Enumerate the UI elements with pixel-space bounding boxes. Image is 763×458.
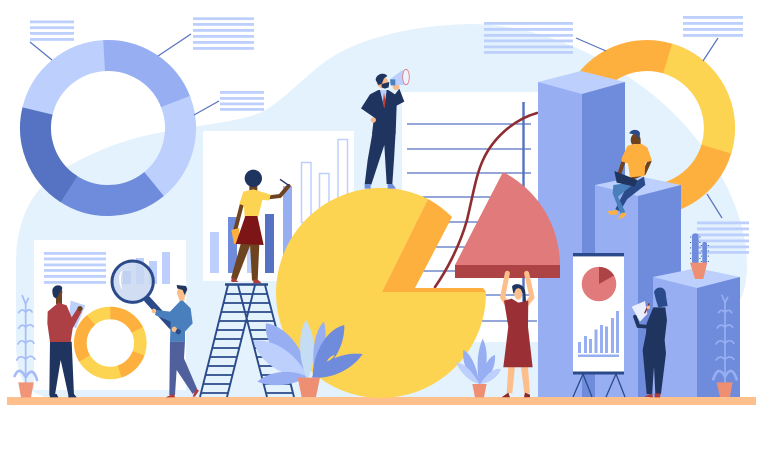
panel: line chart board xyxy=(402,92,540,342)
panel: bar chart board xyxy=(203,131,354,281)
text lines: right xyxy=(697,222,749,254)
person: woman on ladder xyxy=(231,170,289,283)
plant: on short column xyxy=(713,295,737,397)
3D column: short xyxy=(653,268,740,397)
small bars on left board xyxy=(123,252,170,284)
orange donut on left board xyxy=(69,302,151,384)
text lines: top centre right xyxy=(484,22,573,54)
person: man holding magnifier xyxy=(152,285,199,397)
rising trend curve xyxy=(435,113,537,287)
plant: left potted xyxy=(15,296,37,397)
text lines: left board xyxy=(44,252,106,284)
person: man with laptop xyxy=(607,130,652,219)
person: woman lifting slice xyxy=(502,273,533,397)
bar chart xyxy=(210,140,348,273)
person: man with megaphone xyxy=(361,69,409,189)
person: man with clipboard xyxy=(47,285,85,397)
magnifying glass xyxy=(112,261,177,331)
person: woman with paper xyxy=(632,287,668,397)
background blob xyxy=(16,24,747,397)
large yellow pie chart xyxy=(276,188,486,398)
text lines: top right xyxy=(683,16,743,37)
text lines: top centre left xyxy=(193,17,254,50)
line chart grid xyxy=(407,102,537,340)
connector lines xyxy=(30,34,722,218)
plant: small right of pie xyxy=(456,339,501,397)
stepladder xyxy=(200,284,294,397)
3D column: tall xyxy=(538,71,625,397)
3D column: medium xyxy=(595,176,681,397)
text lines: top left xyxy=(30,20,74,41)
donut chart: orange xyxy=(556,37,738,219)
donut chart: blue xyxy=(6,26,210,230)
plant: cactus xyxy=(690,233,708,279)
text lines: beside blue donut xyxy=(220,91,264,111)
ground strip xyxy=(7,397,756,405)
presentation flip chart xyxy=(573,253,625,397)
plant: large leafy centre xyxy=(253,320,363,397)
red pie slice xyxy=(455,172,560,278)
panel: left report board xyxy=(34,240,186,390)
